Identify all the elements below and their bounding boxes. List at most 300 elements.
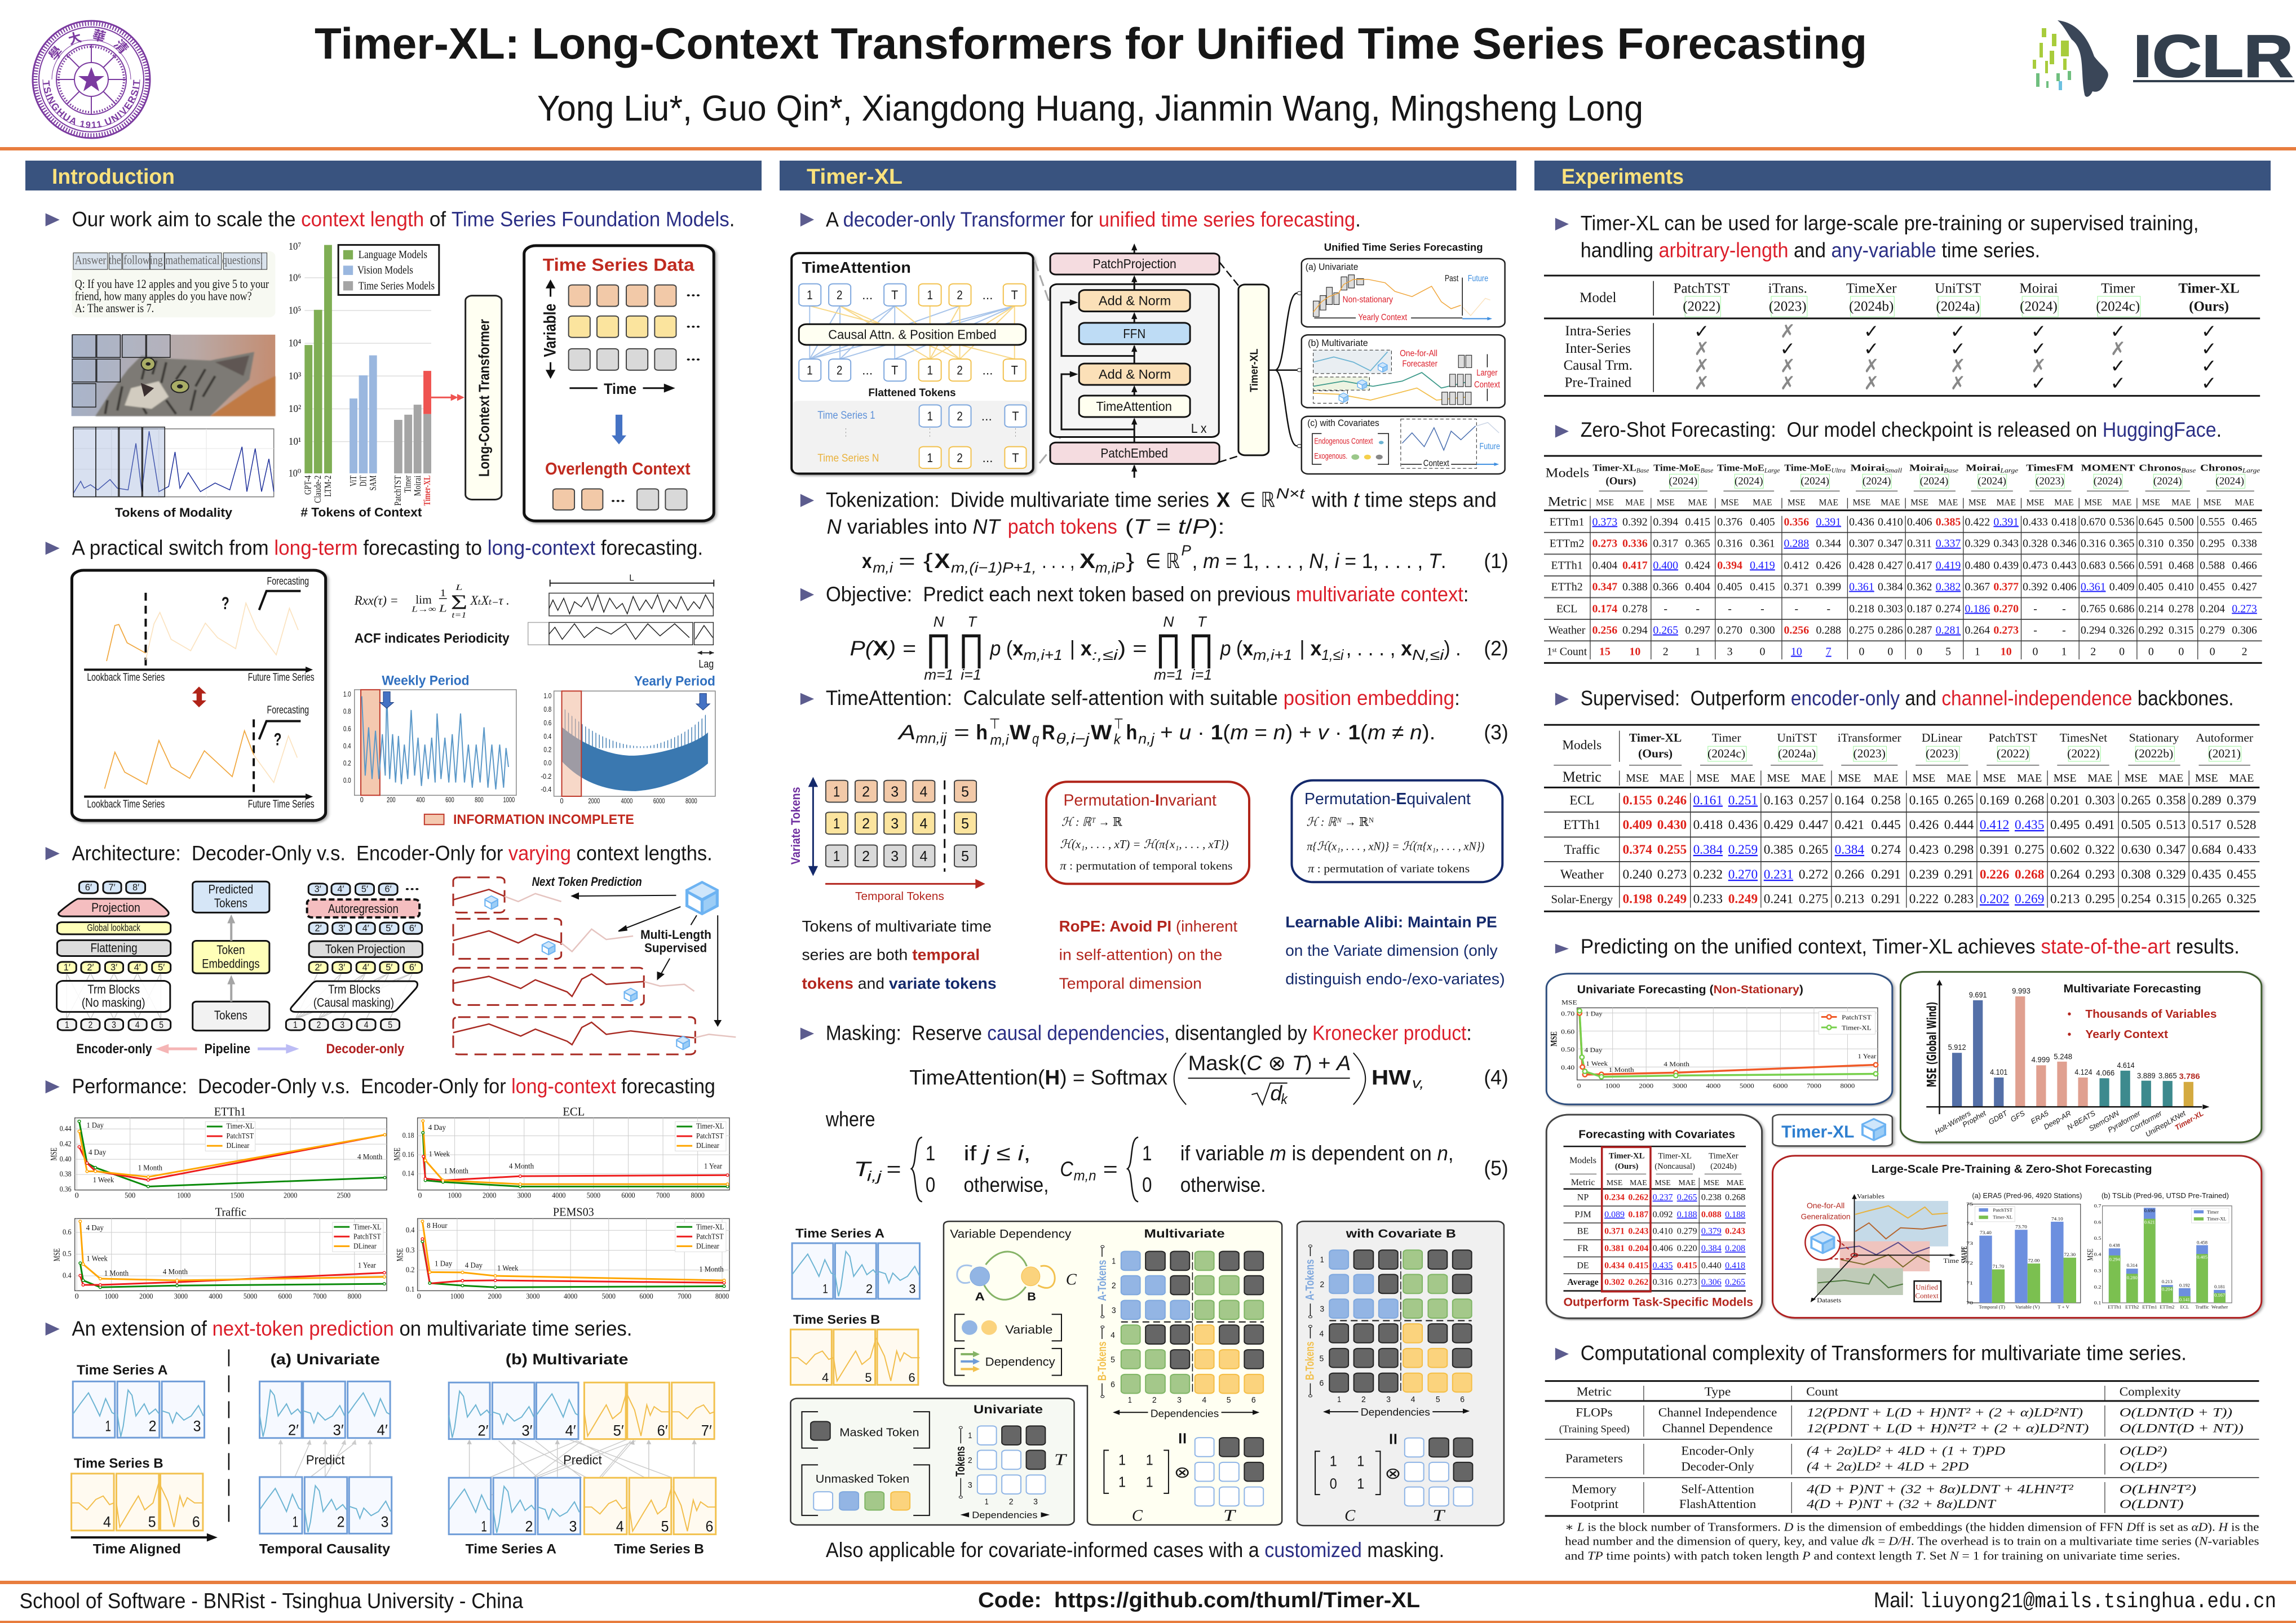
table: model comparison: TimeXer	[1846, 281, 1897, 296]
table: supervised forecasting: Autoformer	[2196, 731, 2253, 744]
panel: TimeAttention: 2	[957, 363, 963, 378]
table: supervised forecasting: MAE	[1874, 772, 1899, 784]
table: complexity: Memory	[1572, 1482, 1617, 1496]
bar chart: tokens of context: PatchTST	[393, 476, 404, 505]
text: tokenization: ∈ ℝ	[1240, 488, 1275, 512]
table: supervised forecasting: 0.445	[1871, 818, 1901, 832]
panel: univariate mask: 1	[985, 1497, 989, 1506]
diagram: encoder-only: 2′	[87, 963, 94, 973]
bar chart: TSLib: 0.167	[2214, 1292, 2225, 1298]
bar chart: ERA5: SMAPE	[1959, 1246, 1969, 1263]
table: supervised forecasting: (Ours)	[1638, 747, 1673, 760]
small series tiles: Time Series A	[795, 1227, 884, 1240]
table: model comparison: (2024b)	[1849, 299, 1894, 314]
table: supervised forecasting: 0.213	[1835, 892, 1864, 907]
table: model comparison: ✓	[2031, 373, 2046, 394]
equation 2: :,≤i	[1092, 646, 1118, 663]
table: model comparison: Model	[1580, 290, 1616, 305]
panel: TimeAttention: T	[1012, 410, 1019, 423]
matrix: multivariate tokens: 2	[1112, 1281, 1116, 1291]
text token example	[72, 251, 275, 317]
line chart: ECL: 1 Month	[444, 1167, 468, 1175]
kronecker: C times T covariate: 0	[1330, 1476, 1337, 1492]
diagram: decoder-only: 4′	[337, 884, 344, 894]
table: zero-shot forecasting: 0.274	[1936, 602, 1961, 615]
table: supervised forecasting: 0.165	[1909, 793, 1939, 808]
table: zero-shot forecasting: 0.419	[1936, 559, 1961, 571]
table: zero-shot forecasting: 0.410	[2169, 581, 2194, 593]
bar chart: TSLib: ETTh2	[2125, 1304, 2139, 1310]
section heading: Experiments: Experiments	[1561, 165, 1684, 189]
table: zero-shot forecasting: MSE	[2204, 498, 2222, 508]
bar chart: ERA5	[1959, 1191, 2082, 1310]
table: supervised forecasting: 0.265	[1799, 842, 1828, 857]
table: zero-shot forecasting: 0.424	[1685, 559, 1710, 571]
table: model comparison: (Ours)	[2189, 299, 2229, 314]
table: zero-shot forecasting: MSE	[2084, 498, 2102, 508]
diagram: univariate next token: Predict	[306, 1453, 345, 1467]
chart: weekly ACF: 0.6	[343, 725, 351, 733]
table: zero-shot forecasting: (2024)	[1920, 475, 1948, 487]
kronecker: C times T: T	[1223, 1506, 1237, 1524]
diagram: decoder-only: 6′	[409, 963, 416, 973]
equation 5: C	[1060, 1158, 1074, 1181]
table: supervised forecasting: 0.232	[1693, 867, 1723, 882]
panel: univariate mask: 2	[1009, 1497, 1014, 1506]
table: zero-shot forecasting: (2024)	[2215, 475, 2244, 487]
panel: large-scale pre-training	[1773, 1156, 2262, 1318]
table: supervised forecasting: 0.433	[2227, 842, 2257, 857]
label: multi-length supervised: Supervised	[644, 941, 707, 955]
table: forecasting with covariates: PJM	[1574, 1210, 1591, 1220]
line chart: Traffic: 1 Month	[104, 1269, 129, 1278]
panel: univariate forecasting: 0.50	[1561, 1046, 1574, 1053]
text: RoPE: RoPE: Avoid PI (inherent	[1059, 918, 1237, 935]
section heading: Timer-XL	[780, 161, 1516, 190]
line chart: ECL: 1 Week	[429, 1150, 450, 1158]
table: supervised forecasting: 0.233	[1693, 892, 1723, 907]
table: forecasting with covariates: MAE	[1630, 1178, 1647, 1187]
line chart: ECL: 4 Day	[428, 1123, 446, 1132]
table: zero-shot forecasting: MSE	[1968, 498, 1987, 508]
diagram: variable dependency graph: C	[1066, 1270, 1077, 1288]
table: forecasting with covariates: (Ours)	[1615, 1162, 1639, 1171]
line chart: ETTh1: DLinear	[227, 1141, 250, 1150]
table: forecasting with covariates: 0.208	[1725, 1244, 1745, 1253]
diagram: variate and temporal tokens: 4	[919, 848, 927, 864]
line chart: PEMS03: 5000	[602, 1292, 616, 1301]
panel: covariates task	[1302, 416, 1505, 474]
diagram: time aligned series	[71, 1363, 218, 1557]
bullet: large-scale pre-training: handling arbitrary-length and any-variable time series.	[1581, 239, 2040, 262]
table: zero-shot forecasting: 0.287	[1907, 624, 1932, 637]
line chart: PEMS03: DLinear	[696, 1241, 719, 1250]
table: supervised forecasting: 0.435	[2015, 818, 2044, 832]
equation 1: }	[1126, 549, 1134, 573]
equation 5: =	[886, 1158, 901, 1181]
table: zero-shot forecasting: 0.400	[1653, 559, 1678, 571]
table: supervised forecasting: 0.418	[1693, 818, 1723, 832]
table: zero-shot forecasting: MAE	[1625, 498, 1645, 508]
table: zero-shot forecasting: 0.410	[1878, 516, 1903, 528]
table: supervised forecasting: 0.630	[2121, 842, 2151, 857]
line chart: ETTh1: 4 Day	[89, 1148, 107, 1156]
table: zero-shot forecasting: Moirai	[1909, 462, 1938, 473]
table: forecasting with covariates: MAE	[1678, 1178, 1696, 1187]
table: zero-shot forecasting: 0.297	[1685, 624, 1710, 637]
box: permutation-invariant	[1046, 782, 1249, 884]
table: forecasting with covariates: 0.188	[1677, 1210, 1697, 1220]
line chart: PEMS03: 8 Hour	[427, 1221, 448, 1230]
equation 2: N	[934, 614, 944, 630]
diagram: time aligned series: 4	[103, 1513, 111, 1530]
table: zero-shot forecasting: 0.311	[1907, 538, 1932, 550]
label: unified time series forecasting: Unified Time Series Forecasting	[1324, 242, 1483, 253]
box: permutation-equivalent: π{ℋ(x₁, . . . , xN)} = ℋ(π{x₁, . . . , xN})	[1307, 840, 1484, 853]
bar chart: TSLib: Timer	[2207, 1209, 2219, 1215]
kronecker: C times T covariate: 1	[1357, 1453, 1364, 1470]
text: Learnable Alibi: distinguish endo-/exo-variates)	[1285, 970, 1505, 988]
table: zero-shot forecasting: 0.385	[1936, 516, 1961, 528]
table: supervised forecasting: ECL	[1569, 793, 1594, 808]
text: objective: Objective: Predict each next token based on previous multivariate context:	[826, 582, 1468, 606]
table: zero-shot forecasting: -	[1664, 602, 1667, 615]
table: supervised forecasting: MSE	[2195, 772, 2218, 784]
panel: multivariate task: Forecaster	[1402, 359, 1437, 369]
labels: multivariate x axis: Timer-XL	[2173, 1109, 2205, 1132]
table: zero-shot forecasting: 0.415	[1685, 516, 1710, 528]
diagram: univariate next token	[259, 1350, 392, 1557]
axis: variable: Variable	[541, 304, 559, 357]
bar chart: TSLib: ETTm2	[2160, 1304, 2174, 1310]
equation 3: n,j	[1138, 730, 1155, 747]
table: zero-shot forecasting: 0.310	[2139, 538, 2164, 550]
table: zero-shot forecasting: Base	[1944, 468, 1958, 475]
illustration: lag windows: Lag	[698, 658, 714, 670]
bar chart: TSLib: 0.621	[2144, 1220, 2155, 1225]
line chart: ECL: 4 Month	[509, 1161, 534, 1170]
diagram: decoder stack: Add & Norm	[1099, 294, 1171, 308]
formula: ACF: lim	[415, 593, 432, 606]
kronecker: C times T: ⊗	[1174, 1463, 1191, 1481]
table: supervised forecasting: MSE	[1838, 772, 1861, 784]
table: supervised forecasting: 0.275	[1799, 892, 1828, 907]
heading: yearly period: Yearly Period	[634, 673, 715, 689]
label: ACF periodicity: ACF indicates Periodicity	[355, 631, 510, 646]
panel: TimeAttention: T	[891, 363, 898, 378]
chart: weekly ACF: 400	[416, 796, 425, 804]
table: supervised forecasting: Metric	[1563, 769, 1602, 785]
table: zero-shot forecasting: 0.337	[1936, 538, 1961, 550]
table: zero-shot forecasting: 0.433	[2023, 516, 2048, 528]
panel: univariate forecasting: 0.70	[1561, 1010, 1574, 1017]
line chart: PEMS03: 0.3	[406, 1245, 414, 1254]
table: zero-shot forecasting: 0.343	[1993, 538, 2019, 550]
panel: univariate forecasting: 4 Month	[1664, 1061, 1689, 1068]
equation 2: 1,≤i	[1321, 646, 1344, 663]
diagram: decoder-only: 4′	[362, 963, 369, 973]
legend: information incomplete: INFORMATION INCOMPLETE	[453, 812, 634, 827]
panel: Timer-XL architecture	[791, 208, 1508, 683]
chart: weekly ACF: 0.4	[343, 742, 351, 750]
small series tiles	[790, 1227, 919, 1385]
equation 3: A	[897, 721, 916, 744]
line chart: ECL	[392, 1105, 729, 1200]
diagram: decoder stack: L x	[1191, 422, 1207, 436]
text: tokenization: Tokenization: Divide multivariate time series	[826, 488, 1209, 512]
equation 2	[850, 614, 1508, 683]
table: zero-shot forecasting: MAE	[2112, 498, 2131, 508]
table: zero-shot forecasting: Small	[1884, 468, 1902, 475]
table: zero-shot forecasting: 0.382	[1936, 581, 1961, 593]
chart: weekly ACF: 1000	[503, 796, 515, 804]
table: forecasting with covariates: 0.262	[1628, 1193, 1648, 1203]
diagram: decoder-only: 2′	[315, 963, 322, 973]
table: supervised forecasting: 0.455	[2227, 867, 2257, 882]
table: supervised forecasting: 0.289	[2192, 793, 2221, 808]
table: supervised forecasting: 0.423	[1909, 842, 1939, 857]
table: zero-shot forecasting: 0.419	[1750, 559, 1775, 571]
table: zero-shot forecasting: TimesFM	[2026, 462, 2074, 473]
label: multi-length supervised	[640, 928, 711, 955]
table: zero-shot forecasting: 0.415	[1750, 581, 1775, 593]
diagram: multivariate next token: 5′	[613, 1422, 624, 1439]
panel: TimeAttention: ...	[982, 289, 993, 302]
text token example: friend, how many apples do you have now?	[75, 289, 252, 303]
diagram: encoder-only: Projection	[91, 901, 140, 915]
table: forecasting with covariates: 0.268	[1725, 1193, 1745, 1203]
labels: multivariate x axis: Holt-Winters	[1933, 1108, 1972, 1136]
heading: weekly period: Weekly Period	[382, 673, 470, 688]
bullet: decoder-only: A decoder-only Transformer for unified time series forecasting.	[826, 208, 1361, 231]
table: zero-shot forecasting: 0.366	[1653, 581, 1678, 593]
panel: multivariate forecasting: 3.786	[2179, 1072, 2200, 1081]
table: zero-shot forecasting: Time-MoE	[1784, 462, 1829, 473]
table: zero-shot forecasting: 0.591	[2139, 559, 2164, 571]
equation 4: k	[1281, 1091, 1288, 1107]
labels: multivariate x axis: Prophet	[1961, 1108, 1988, 1129]
table: zero-shot forecasting: 0.328	[2023, 538, 2048, 550]
diagram: decoder-only: Decoder-only	[326, 1041, 404, 1057]
bar chart: tokens of context: Language Models	[359, 249, 427, 261]
table: zero-shot forecasting: 0.466	[2232, 559, 2257, 571]
chart: weekly ACF: 800	[475, 796, 484, 804]
table: zero-shot forecasting: MSE	[1788, 498, 1806, 508]
equation 5: 0	[1142, 1173, 1152, 1196]
matrix: covariate tokens	[1303, 1245, 1472, 1418]
panel: univariate forecasting: 0	[1577, 1083, 1581, 1089]
table: forecasting with covariates: MSE	[1704, 1178, 1719, 1187]
line chart: ETTh1: 1000	[177, 1191, 191, 1200]
table: zero-shot forecasting: Ultra	[1832, 468, 1846, 475]
table: supervised forecasting: (2024a)	[1778, 747, 1816, 760]
heading: overlength context: Overlength Context	[545, 459, 691, 478]
matrix: covariate tokens: 5	[1319, 1354, 1324, 1363]
line chart: Traffic: 0	[75, 1292, 79, 1301]
line chart: Traffic: 6000	[278, 1292, 292, 1301]
chart: weekly ACF: 0.0	[343, 777, 351, 784]
diagram: univariate next token: 4′	[377, 1421, 388, 1438]
bar chart: ERA5: PatchTST	[1993, 1208, 2012, 1213]
line chart: ETTh1: 2500	[337, 1191, 351, 1200]
line chart: PEMS03: 8000	[715, 1292, 729, 1301]
table: supervised forecasting: 0.517	[2192, 818, 2221, 832]
bar chart: TSLib: 0.181	[2214, 1284, 2225, 1289]
equation 2: P(X) =	[850, 637, 916, 660]
panel: multivariate forecasting: 4.999	[2032, 1055, 2050, 1064]
equation 5: =	[1103, 1158, 1118, 1181]
table: supervised forecasting: 0.329	[2156, 867, 2186, 882]
label: multi-length supervised: Multi-Length	[640, 928, 711, 942]
table: zero-shot forecasting: (2024)	[1978, 475, 2006, 487]
labels: multivariate x axis: GFS	[2009, 1108, 2027, 1124]
diagram: decoder-only: 3	[340, 1020, 344, 1030]
table: zero-shot forecasting: 15	[1599, 646, 1611, 658]
labels: multivariate x axis	[1933, 1108, 2205, 1138]
equation 5	[853, 1137, 1508, 1201]
diagram: variate and temporal tokens: 5	[961, 848, 969, 864]
table: supervised forecasting: 0.421	[1835, 818, 1864, 832]
matrix: multivariate tokens: A-Tokens	[1095, 1260, 1109, 1301]
kronecker: C times T covariate: ⊗	[1384, 1465, 1401, 1482]
bar chart: tokens of context: DiT	[359, 476, 369, 486]
table: supervised forecasting: (2022)	[1997, 747, 2029, 760]
table: supervised forecasting: Solar-Energy	[1551, 894, 1613, 906]
panel: multivariate mask	[944, 1221, 1282, 1525]
table: zero-shot forecasting: 0.412	[1784, 559, 1809, 571]
formula: ACF: L	[439, 602, 447, 614]
table: forecasting with covariates: NP	[1577, 1193, 1589, 1203]
equation 5: 1	[1142, 1142, 1152, 1165]
small series tiles: 3	[909, 1282, 916, 1296]
equation 2: ∏	[926, 627, 952, 669]
diagram: multivariate next token: 5	[661, 1518, 669, 1535]
table: supervised forecasting: Traffic	[1564, 842, 1600, 857]
panel: univariate forecasting	[1546, 974, 1892, 1105]
table: supervised forecasting: MAE	[2087, 772, 2112, 784]
table: zero-shot forecasting: 1	[2061, 646, 2067, 658]
diagram: decoder-only: 3′	[315, 884, 321, 894]
line chart: PEMS03: 4000	[564, 1292, 577, 1301]
diagram: decoder-only: Trm Blocks	[328, 983, 381, 996]
logo: Timer-XL	[1773, 1115, 1892, 1146]
table: zero-shot forecasting: 0.392	[1622, 516, 1648, 528]
diagram: encoder-only: 1	[65, 1020, 69, 1030]
table: forecasting with covariates: Timer-XL	[1658, 1151, 1692, 1160]
table: zero-shot forecasting: -	[2033, 624, 2037, 637]
illustration: unified context axes: Generalization	[1801, 1213, 1851, 1221]
heading: time series data: Time Series Data	[543, 255, 694, 275]
panel: multivariate task: One-for-All	[1400, 348, 1437, 358]
table: forecasting with covariates: Models	[1569, 1156, 1596, 1165]
table: zero-shot forecasting: MSE	[1721, 498, 1739, 508]
panel: univariate forecasting: 4000	[1706, 1083, 1720, 1089]
equation 2: m=1	[924, 666, 953, 683]
table: supervised forecasting: 0.231	[1764, 867, 1793, 882]
table: supervised forecasting: 0.409	[1622, 818, 1652, 832]
table: zero-shot forecasting: 0.367	[1965, 581, 1990, 593]
table: zero-shot forecasting: 0.376	[1717, 516, 1742, 528]
illustration: unified context axes	[1801, 1193, 1959, 1304]
table: zero-shot forecasting: MAE	[2171, 498, 2191, 508]
table: complexity: Channel Dependence	[1662, 1422, 1773, 1435]
table: complexity: Parameters	[1565, 1452, 1623, 1465]
equation 3: ⊤	[989, 716, 1001, 732]
line chart: PEMS03	[395, 1205, 729, 1301]
table: zero-shot forecasting: 0.399	[1816, 581, 1841, 593]
table: supervised forecasting: (2022b)	[2135, 747, 2173, 760]
table: model comparison: ✗	[2110, 338, 2126, 360]
table: zero-shot forecasting: MSE	[1853, 498, 1870, 508]
diagram: encoder-only: Trm Blocks	[87, 983, 140, 996]
panel: univariate forecasting: 1 Week	[1586, 1060, 1608, 1067]
panel: univariate task: Past	[1445, 273, 1459, 283]
bar chart: tokens of context: Timer	[403, 476, 413, 493]
panel: TimeAttention: 1	[807, 363, 813, 378]
panel: TimeAttention: ...	[981, 410, 992, 423]
table: supervised forecasting: 0.385	[1764, 842, 1793, 857]
diagram: decoder stack: TimeAttention	[1096, 400, 1172, 414]
panel: TimeAttention: ...	[862, 363, 873, 378]
bar chart: ERA5: 74.10	[2051, 1216, 2063, 1221]
line chart: Traffic: 4 Month	[163, 1267, 188, 1276]
line chart: ECL: 7000	[656, 1191, 670, 1200]
equation 3: h	[1126, 721, 1137, 744]
table: forecasting with covariates: 0.418	[1725, 1261, 1745, 1270]
table: model comparison: ✓	[2201, 338, 2217, 360]
table: zero-shot forecasting: 0.344	[1816, 538, 1841, 550]
bar chart: ERA5: Variable (V)	[2015, 1304, 2040, 1310]
chart: weekly ACF: 1.0	[343, 691, 351, 698]
diagram: variate and temporal tokens: 5	[961, 815, 969, 832]
table: zero-shot forecasting: 0.256	[1592, 624, 1617, 637]
table: complexity: Complexity	[2120, 1385, 2181, 1399]
matrix: multivariate tokens: 2	[1152, 1396, 1157, 1405]
diagram: variable dependency graph	[957, 1252, 1077, 1303]
table: zero-shot forecasting: 0.455	[2200, 581, 2225, 593]
diagram: encoder-only: Flattening	[90, 941, 138, 955]
equation 1: X	[934, 549, 950, 573]
table: model comparison: PatchTST	[1674, 281, 1730, 296]
panel: TimeAttention: T	[1011, 363, 1018, 378]
line chart: ETTh1	[49, 1105, 387, 1200]
table: supervised forecasting: 0.240	[1622, 867, 1652, 882]
panel: TimeAttention: 1	[927, 289, 933, 302]
table: supervised forecasting: 0.226	[1980, 867, 2009, 882]
table: supervised forecasting: MSE	[1913, 772, 1935, 784]
table: supervised forecasting: (2024c)	[1707, 747, 1745, 760]
footnote	[1565, 1520, 2259, 1562]
panel: univariate forecasting: 2000	[1639, 1083, 1653, 1089]
table: supervised forecasting: 0.275	[2015, 842, 2044, 857]
table: forecasting with covariates: MAE	[1727, 1178, 1744, 1187]
text: tokens explanation: series are both temporal	[802, 946, 980, 964]
panel: TimeAttention: 1	[927, 451, 933, 465]
panel: TimeAttention: Time Series 1	[817, 409, 875, 422]
bar chart: ERA5: 72.00	[2028, 1258, 2040, 1263]
table: zero-shot forecasting: 0.427	[1878, 559, 1903, 571]
diagram: univariate next token: 2	[337, 1513, 344, 1530]
equation 2: , . . . , x	[1346, 637, 1412, 660]
table: forecasting with covariates: 0.381	[1604, 1244, 1625, 1253]
table: zero-shot forecasting: Timer-XL	[1592, 462, 1635, 473]
chart: yearly ACF	[541, 691, 715, 805]
panel: multivariate forecasting: Yearly Context	[2085, 1028, 2168, 1040]
table: zero-shot forecasting: 0.326	[2109, 624, 2134, 637]
diagram: univariate next token: 3	[381, 1513, 389, 1530]
diagram: multivariate next token: 3	[569, 1518, 577, 1535]
panel: with covariate B: with Covariate B	[1346, 1227, 1456, 1240]
